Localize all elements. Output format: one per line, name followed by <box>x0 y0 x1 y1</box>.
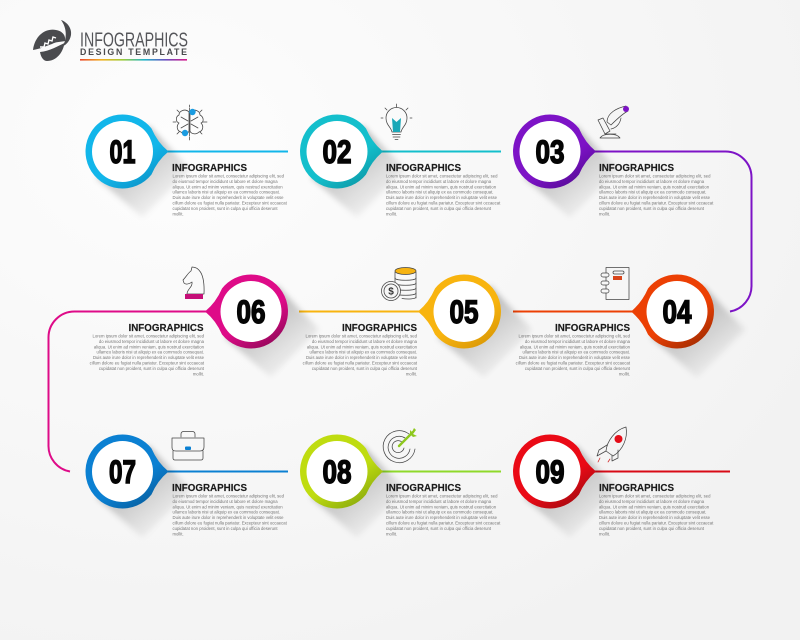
step 02: cupidatat non proident, sunt in culpa qui officia deserunt <box>386 206 492 211</box>
step 06: Lorem ipsum dolor sit amet, consectetur adipiscing elit, sed <box>92 334 205 338</box>
step 07: mollit. <box>172 531 184 536</box>
step 05: do eiusmod tempor incididunt ut labore et dolore magna <box>312 339 418 344</box>
step 07: Lorem ipsum dolor sit amet, consectetur adipiscing elit, sed <box>172 494 285 498</box>
step 03: 03 <box>536 134 564 170</box>
step 05: cillum dolore eu fugiat nulla pariatur. Excepteur sint occaecat <box>303 360 418 366</box>
step 04: do eiusmod tempor incididunt ut labore et dolore magna <box>525 339 631 344</box>
step 06: INFOGRAPHICS <box>128 323 204 334</box>
icon: briefcase <box>172 432 204 460</box>
connector: 07 <box>165 470 288 472</box>
step 07: ullamco laboris nisi ut aliquip ex ea commodo consequat. <box>172 510 280 515</box>
step 01: cillum dolore eu fugiat nulla pariatur. Excepteur sint occaecat <box>172 200 288 206</box>
step 08: 08 <box>322 454 352 490</box>
step 09: Duis aute irure dolor in reprehenderit in voluptate velit esse <box>599 515 711 520</box>
step 09: do eiusmod tempor incididunt ut labore et dolore magna <box>599 499 705 504</box>
step 02: mollit. <box>386 211 397 216</box>
step 02: 02 <box>322 134 352 170</box>
step 01: Duis aute irure dolor in reprehenderit in voluptate velit esse <box>172 195 284 200</box>
step 03: aliqua. Ut enim ad minim veniam, quis nostrud exercitation <box>599 184 710 189</box>
step 09: aliqua. Ut enim ad minim veniam, quis nostrud exercitation <box>599 504 710 509</box>
step 04: ullamco laboris nisi ut aliquip ex ea commodo consequat. <box>522 350 630 355</box>
step 03: Lorem ipsum dolor sit amet, consectetur adipiscing elit, sed <box>599 174 711 178</box>
step 03 <box>513 114 714 218</box>
step 05: 05 <box>450 294 478 330</box>
step 09: cupidatat non proident, sunt in culpa qui officia deserunt <box>599 526 705 531</box>
step 08: INFOGRAPHICS <box>386 483 461 494</box>
logo <box>33 20 188 61</box>
icon: brain <box>173 105 207 140</box>
step 06: cupidatat non proident, sunt in culpa qui officia deserunt <box>99 366 205 371</box>
rainbow bar <box>80 59 187 61</box>
step 07: do eiusmod tempor incididunt ut labore et dolore magna <box>172 499 278 504</box>
step 05 <box>303 274 532 378</box>
step 02: aliqua. Ut enim ad minim veniam, quis nostrud exercitation <box>386 184 497 189</box>
step 06: cillum dolore eu fugiat nulla pariatur. Excepteur sint occaecat <box>90 360 205 366</box>
step 06: mollit. <box>193 371 204 376</box>
step 02: do eiusmod tempor incididunt ut labore et dolore magna <box>386 179 492 184</box>
logo mark <box>33 20 71 61</box>
step 07: aliqua. Ut enim ad minim veniam, quis nostrud exercitation <box>172 504 283 509</box>
step 01: INFOGRAPHICS <box>172 163 247 174</box>
step 01: Lorem ipsum dolor sit amet, consectetur adipiscing elit, sed <box>172 174 285 178</box>
connector: 05 <box>299 310 420 312</box>
icon: microscope <box>598 106 629 138</box>
connector: 02 <box>380 150 501 152</box>
step 01: 01 <box>110 134 136 170</box>
connector: 08 <box>380 470 501 472</box>
step 05: INFOGRAPHICS <box>342 323 417 334</box>
step 08: Duis aute irure dolor in reprehenderit in voluptate velit esse <box>386 515 498 520</box>
step 08: do eiusmod tempor incididunt ut labore et dolore magna <box>386 499 492 504</box>
step 03: INFOGRAPHICS <box>599 163 674 174</box>
step 03: mollit. <box>599 211 610 216</box>
step 07: cillum dolore eu fugiat nulla pariatur. Excepteur sint occaecat <box>172 520 288 526</box>
step 07: cupidatat non proident, sunt in culpa qui officia deserunt <box>172 526 278 531</box>
step 06: 06 <box>236 294 266 330</box>
step 01: cupidatat non proident, sunt in culpa qui officia deserunt <box>172 206 278 211</box>
icon: target <box>383 428 417 463</box>
step 04: Duis aute irure dolor in reprehenderit in voluptate velit esse <box>519 355 631 360</box>
step 08: cillum dolore eu fugiat nulla pariatur. Excepteur sint occaecat <box>386 520 501 526</box>
step 01: aliqua. Ut enim ad minim veniam, quis nostrud exercitation <box>172 184 283 189</box>
step 04: aliqua. Ut enim ad minim veniam, quis nostrud exercitation <box>520 344 631 349</box>
step 09: ullamco laboris nisi ut aliquip ex ea commodo consequat. <box>599 510 706 515</box>
icon: coins <box>382 268 416 300</box>
step 01: mollit. <box>172 211 184 216</box>
step 08: aliqua. Ut enim ad minim veniam, quis nostrud exercitation <box>386 504 497 509</box>
icon: notebook <box>601 268 629 300</box>
icon: light bulb <box>381 104 412 140</box>
step 09: INFOGRAPHICS <box>599 483 674 494</box>
step 09: Lorem ipsum dolor sit amet, consectetur adipiscing elit, sed <box>599 494 711 498</box>
step 05: Duis aute irure dolor in reprehenderit in voluptate velit esse <box>306 355 418 360</box>
icon: coins: $ <box>388 286 394 298</box>
step 08: Lorem ipsum dolor sit amet, consectetur adipiscing elit, sed <box>386 494 498 498</box>
step 09 <box>513 434 714 538</box>
step 09: 09 <box>536 454 564 490</box>
step 03: do eiusmod tempor incididunt ut labore et dolore magna <box>599 179 705 184</box>
connector: 04 <box>513 310 632 312</box>
step 05: mollit. <box>406 371 417 376</box>
step 08 <box>300 434 501 538</box>
step 07: 07 <box>109 454 136 490</box>
connector: 01 <box>165 150 288 152</box>
step 02: ullamco laboris nisi ut aliquip ex ea commodo consequat. <box>386 190 494 195</box>
step 04 <box>516 274 745 378</box>
step 03: cupidatat non proident, sunt in culpa qui officia deserunt <box>599 206 705 211</box>
step 09: mollit. <box>599 531 610 536</box>
step 02: cillum dolore eu fugiat nulla pariatur. Excepteur sint occaecat <box>386 200 501 206</box>
step 07: INFOGRAPHICS <box>172 483 247 494</box>
step 05: aliqua. Ut enim ad minim veniam, quis nostrud exercitation <box>307 344 418 349</box>
step 06: Duis aute irure dolor in reprehenderit in voluptate velit esse <box>93 355 205 360</box>
step 05: cupidatat non proident, sunt in culpa qui officia deserunt <box>312 366 418 371</box>
step 04: 04 <box>662 294 692 330</box>
connector: 09 <box>594 470 730 472</box>
step 03: Duis aute irure dolor in reprehenderit in voluptate velit esse <box>599 195 711 200</box>
step 07 <box>86 434 288 538</box>
step 06: aliqua. Ut enim ad minim veniam, quis nostrud exercitation <box>94 344 205 349</box>
connector: 06 to 07 <box>48 311 206 472</box>
step 02: Lorem ipsum dolor sit amet, consectetur adipiscing elit, sed <box>386 174 498 178</box>
logo subtitle: DESIGN TEMPLATE <box>80 47 187 57</box>
step 04: cupidatat non proident, sunt in culpa qui officia deserunt <box>525 366 631 371</box>
step 03: cillum dolore eu fugiat nulla pariatur. Excepteur sint occaecat <box>599 200 714 206</box>
step 08: mollit. <box>386 531 397 536</box>
step 03: ullamco laboris nisi ut aliquip ex ea commodo consequat. <box>599 190 706 195</box>
step 04: INFOGRAPHICS <box>555 323 630 334</box>
step 06: ullamco laboris nisi ut aliquip ex ea commodo consequat. <box>96 350 204 355</box>
step 01: ullamco laboris nisi ut aliquip ex ea commodo consequat. <box>172 190 280 195</box>
step 01: do eiusmod tempor incididunt ut labore et dolore magna <box>172 179 278 184</box>
step 04: Lorem ipsum dolor sit amet, consectetur adipiscing elit, sed <box>518 334 631 338</box>
step 07: Duis aute irure dolor in reprehenderit in voluptate velit esse <box>172 515 284 520</box>
step 06 <box>90 274 319 378</box>
icon: chess knight <box>183 267 204 299</box>
step 09: cillum dolore eu fugiat nulla pariatur. Excepteur sint occaecat <box>599 520 714 526</box>
step 06: do eiusmod tempor incididunt ut labore et dolore magna <box>99 339 205 344</box>
icon: rocket <box>597 427 626 462</box>
step 08: ullamco laboris nisi ut aliquip ex ea commodo consequat. <box>386 510 494 515</box>
logo title: INFOGRAPHICS <box>80 28 188 52</box>
step 05: Lorem ipsum dolor sit amet, consectetur adipiscing elit, sed <box>306 334 418 338</box>
step 04: mollit. <box>619 371 630 376</box>
step 02: Duis aute irure dolor in reprehenderit in voluptate velit esse <box>386 195 498 200</box>
connector: 03 to 04 <box>594 151 752 312</box>
step 01 <box>86 114 288 218</box>
step 02: INFOGRAPHICS <box>386 163 461 174</box>
step 08: cupidatat non proident, sunt in culpa qui officia deserunt <box>386 526 492 531</box>
step 05: ullamco laboris nisi ut aliquip ex ea commodo consequat. <box>310 350 417 355</box>
step 04: cillum dolore eu fugiat nulla pariatur. Excepteur sint occaecat <box>516 360 631 366</box>
step 02 <box>300 114 501 218</box>
